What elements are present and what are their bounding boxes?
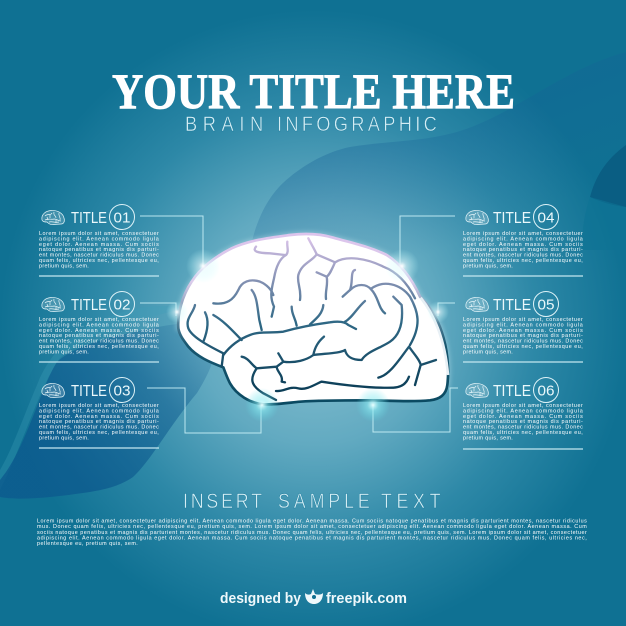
brain illustration <box>178 234 448 404</box>
text block 02: natoque penatibus et magnis dis parturi- <box>39 333 159 339</box>
text block 01: eget dolor. Aenean massa. Cum sociis <box>39 242 159 248</box>
text block 03: adipiscing elit. Aenean commodo ligula <box>39 408 159 414</box>
text block 04: natoque penatibus et magnis dis parturi- <box>463 247 583 253</box>
text block 05: Lorem ipsum dolor sit amet, consectetuer <box>463 317 583 323</box>
text block 06: pretium quis, sem. <box>463 436 513 442</box>
text block 05: ent montes, nascetur ridiculus mus. Donec <box>463 339 583 345</box>
bottom text block: adipiscing elit. Aenean commodo ligula eget dolor. Aenean massa. Cum sociis natoque penatibus et magnis dis parturient montes, nascetur ridiculus mus. Donec quam felis, ultricies nec, <box>37 535 587 541</box>
bottom text block: mus. Donec quam felis, ultricies nec, pellentesque eu, pretium quis, sem. Lorem ipsum dolor sit amet, consectetuer adipiscing elit. Aenean commodo ligula eget dolor. Aenean massa. Cum <box>37 524 587 530</box>
text block 05: quam felis, ultricies nec, pellentesque eu, <box>463 344 583 350</box>
heading: title 05: TITLE <box>493 297 531 314</box>
text block 04: ent montes, nascetur ridiculus mus. Donec <box>463 253 583 259</box>
footer credit: designed by <box>220 591 301 607</box>
text block 04: pretium quis, sem. <box>463 264 513 270</box>
text block 03: quam felis, ultricies nec, pellentesque eu, <box>39 430 159 436</box>
section heading: insert sample text: INSERT <box>183 490 262 513</box>
text block 02 <box>39 317 159 356</box>
text block 06 <box>463 403 583 442</box>
subtitle <box>185 113 437 136</box>
background wave: upper swoosh <box>250 52 626 300</box>
text block 01: adipiscing elit. Aenean commodo ligula <box>39 236 159 242</box>
panel: title 01 <box>39 204 159 276</box>
text block 05: natoque penatibus et magnis dis parturi- <box>463 333 583 339</box>
footer credit <box>220 589 407 607</box>
text block 06: adipiscing elit. Aenean commodo ligula <box>463 408 583 414</box>
icon: brain 02 <box>42 297 64 312</box>
brain glow spots <box>166 249 449 422</box>
text block 06: eget dolor. Aenean massa. Cum sociis <box>463 414 583 420</box>
icon: brain 04 <box>466 210 488 225</box>
heading: title 02: TITLE <box>71 297 107 314</box>
text block 05: pretium quis, sem. <box>463 350 513 356</box>
text block 03: eget dolor. Aenean massa. Cum sociis <box>39 414 159 420</box>
text block 06: quam felis, ultricies nec, pellentesque eu, <box>463 430 583 436</box>
text block 01: Lorem ipsum dolor sit amet, consectetuer <box>39 231 159 237</box>
text block 02: ent montes, nascetur ridiculus mus. Donec <box>39 339 159 345</box>
text block 01: quam felis, ultricies nec, pellentesque eu, <box>39 258 159 264</box>
number badge 06: 06 <box>538 382 554 400</box>
text block 04: adipiscing elit. Aenean commodo ligula <box>463 236 583 242</box>
text block 02: adipiscing elit. Aenean commodo ligula <box>39 322 159 328</box>
brain outline <box>178 234 448 404</box>
text block 06: ent montes, nascetur ridiculus mus. Donec <box>463 425 583 431</box>
text block 02: quam felis, ultricies nec, pellentesque eu, <box>39 344 159 350</box>
icon: brain 03 <box>42 383 64 398</box>
text block 03: ent montes, nascetur ridiculus mus. Donec <box>39 425 159 431</box>
section heading: insert sample text <box>183 490 441 513</box>
text block 06: Lorem ipsum dolor sit amet, consectetuer <box>463 403 583 409</box>
text block 03: pretium quis, sem. <box>39 436 89 442</box>
text block 02: Lorem ipsum dolor sit amet, consectetuer <box>39 317 159 323</box>
text block 05 <box>463 317 583 356</box>
panel: title 04 <box>463 204 583 276</box>
icon: freepik logo <box>305 589 323 604</box>
subtitle: INFOGRAPHIC <box>277 113 437 136</box>
heading: title 06: TITLE <box>493 383 531 400</box>
subtitle: BRAIN <box>185 113 263 136</box>
panel: title 05 <box>463 292 583 362</box>
text block 02: pretium quis, sem. <box>39 350 89 356</box>
panel: title 03 <box>39 378 159 448</box>
text block 01: ent montes, nascetur ridiculus mus. Donec <box>39 253 159 259</box>
background wave: right dark blob <box>590 145 626 207</box>
text block 06: natoque penatibus et magnis dis parturi- <box>463 419 583 425</box>
icon: brain 06 <box>466 383 488 398</box>
section heading: insert sample text: TEXT <box>381 490 441 513</box>
text block 03 <box>39 403 159 442</box>
text block 05: eget dolor. Aenean massa. Cum sociis <box>463 328 583 334</box>
footer credit: freepik.com <box>326 591 407 607</box>
heading: title 01: TITLE <box>71 210 107 227</box>
bottom text block <box>37 519 587 547</box>
bottom text block: sociis natoque penatibus et magnis dis parturient montes, nascetur ridiculus mus. Donec quam felis, ultricies nec, pellentesque eu, pretium quis, sem. Lorem ipsum dolor sit amet, consectetuer <box>37 530 587 536</box>
text block 01: natoque penatibus et magnis dis parturi- <box>39 247 159 253</box>
number badge 03: 03 <box>114 382 130 400</box>
number badge 04: 04 <box>538 210 554 226</box>
background wave: right band <box>582 197 626 250</box>
title: YOUR TITLE HERE <box>112 63 515 119</box>
panel: title 02 <box>39 292 159 362</box>
background wave: lower-left stripe <box>0 306 185 490</box>
text block 03: natoque penatibus et magnis dis parturi- <box>39 419 159 425</box>
text block 02: eget dolor. Aenean massa. Cum sociis <box>39 328 159 334</box>
heading: title 03: TITLE <box>71 383 107 400</box>
brain folds <box>188 238 436 400</box>
text block 04: Lorem ipsum dolor sit amet, consectetuer <box>463 231 583 237</box>
text block 04 <box>463 231 583 270</box>
panel: title 06 <box>463 378 583 449</box>
brain halo <box>178 234 448 385</box>
bottom text block: Lorem ipsum dolor sit amet, consectetuer adipiscing elit. Aenean commodo ligula eget dolor. Aenean massa. Cum sociis natoque penatibus et magnis dis parturient montes, nascetur ridiculus <box>37 519 587 525</box>
section heading: insert sample text: SAMPLE <box>278 490 370 513</box>
icon: brain 05 <box>466 297 488 312</box>
text block 01: pretium quis, sem. <box>39 264 89 270</box>
text block 01 <box>39 231 159 270</box>
background wave: lower-left leaf <box>0 322 228 499</box>
heading: title 04: TITLE <box>493 210 531 227</box>
text block 04: quam felis, ultricies nec, pellentesque eu, <box>463 258 583 264</box>
icon: brain 01 <box>42 210 64 225</box>
bottom text block: pellentesque eu, pretium quis, sem. <box>37 541 138 547</box>
text block 03: Lorem ipsum dolor sit amet, consectetuer <box>39 403 159 409</box>
brain right edge highlight <box>421 298 448 375</box>
connector lines <box>140 216 458 433</box>
number badge 02: 02 <box>114 296 130 314</box>
number badge 01: 01 <box>114 210 130 226</box>
text block 04: eget dolor. Aenean massa. Cum sociis <box>463 242 583 248</box>
number badge 05: 05 <box>538 296 554 314</box>
text block 05: adipiscing elit. Aenean commodo ligula <box>463 322 583 328</box>
